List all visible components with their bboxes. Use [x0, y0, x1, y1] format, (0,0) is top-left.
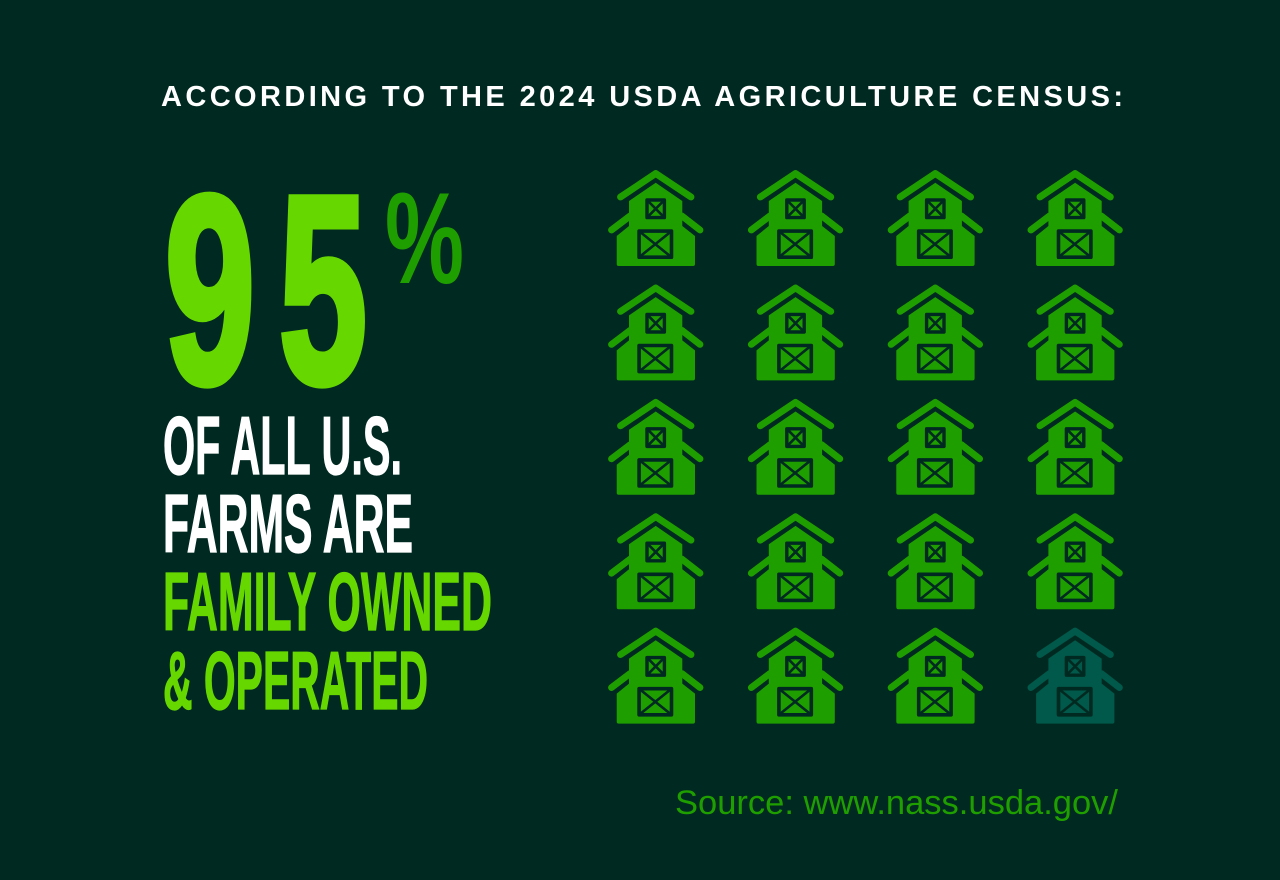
barn row 1 col 1: [612, 174, 700, 266]
statement text: [163, 399, 492, 727]
source line: Source: www.nass.usda.gov/: [675, 784, 1119, 822]
barn row 4 col 4: [1031, 517, 1119, 609]
heading: ACCORDING TO THE 2024 USDA AGRICULTURE CENSUS:: [161, 81, 1123, 113]
barn row 3 col 3: [891, 402, 980, 495]
barn row 1 col 3: [891, 174, 980, 266]
barn row 1 col 4: [1031, 174, 1119, 266]
statement text: OF ALL U.S.: [163, 399, 402, 492]
barn row 3 col 4: [1031, 402, 1119, 495]
barn row 5 col 2: [751, 631, 840, 724]
barn row 4 col 2: [751, 517, 840, 609]
line: family owned: FAMILY OWNED: [163, 555, 492, 648]
big statistic: 95 percent: [165, 140, 464, 439]
barn row 4 col 3: [891, 517, 980, 609]
barn row 2 col 1: [612, 288, 700, 380]
barn row 5 col 1: [612, 631, 700, 724]
barn row 3 col 2: [751, 402, 840, 495]
barn row 5 col 4: muted remaining 5 percent: [1031, 631, 1119, 724]
barn row 4 col 1: [612, 517, 700, 609]
barn row 5 col 3: [891, 631, 980, 724]
line: farms are: FARMS ARE: [163, 477, 413, 570]
digit 9: 9: [165, 140, 255, 439]
barn row 2 col 4: [1031, 288, 1119, 380]
barn row 2 col 3: [891, 288, 980, 380]
percent sign: %: [385, 165, 464, 311]
barn row 2 col 2: [751, 288, 840, 380]
barn row 1 col 2: [751, 174, 840, 266]
pictogram grid of 20 barns: [612, 174, 1119, 724]
barn row 3 col 1: [612, 402, 700, 495]
statement text: & OPERATED: [163, 634, 428, 727]
digit 5: 5: [279, 140, 367, 439]
